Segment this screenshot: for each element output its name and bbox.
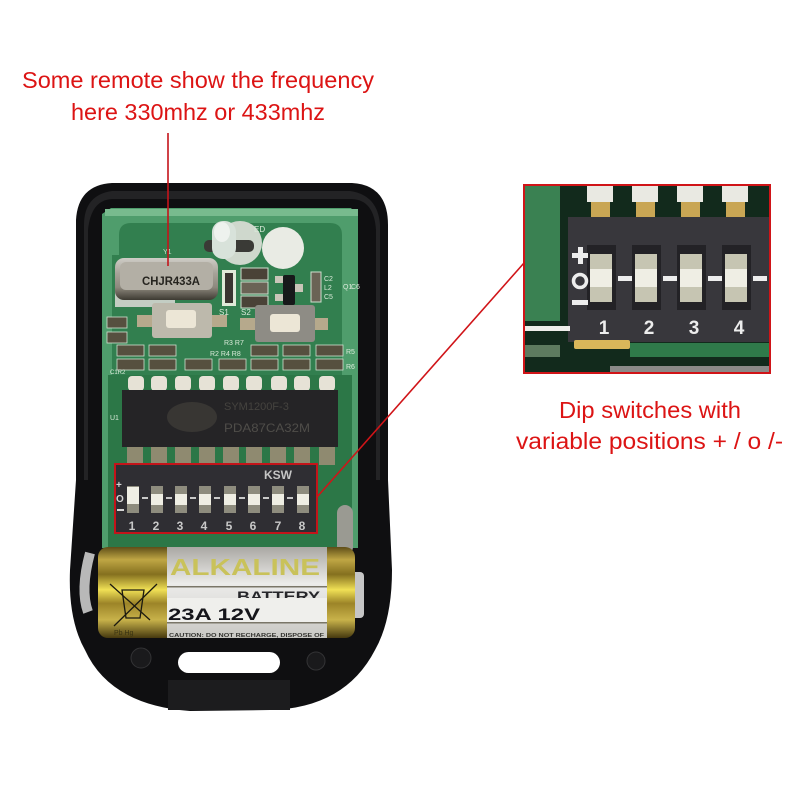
small SMD parts (222, 268, 360, 308)
switch numbers: 3 (177, 519, 184, 533)
red frame (524, 185, 770, 373)
sliders (590, 254, 747, 302)
switch body (568, 217, 770, 342)
slider wells (587, 245, 751, 310)
battery label: ALKALINE (170, 554, 320, 580)
callout line: crystal (167, 133, 169, 266)
small SMD parts: L2 (324, 285, 332, 292)
push button S1 (137, 303, 229, 338)
crystal with frequency marking: CHJR433A (142, 276, 200, 288)
circuit board: C1R2 (110, 370, 126, 376)
remote control housing (70, 183, 392, 711)
circuit board: Y1 (163, 249, 172, 256)
resistor rows (107, 317, 343, 370)
keyring slot (178, 652, 280, 673)
close-up numbers: 1 (599, 318, 610, 339)
circuit board: R6 (346, 364, 355, 371)
close-up numbers (599, 318, 745, 339)
recycling crossed-bin mark: Pb Hg (114, 630, 134, 637)
bottom tab (168, 680, 290, 710)
IC pins (128, 376, 335, 391)
battery (84, 547, 364, 639)
close-up numbers: 4 (734, 318, 745, 339)
callout text: frequency note: Some remote show the frequency (22, 67, 375, 93)
switch sliders (127, 486, 309, 513)
switch numbers: 1 (129, 519, 136, 533)
callout text: frequency note: here 330mhz or 433mhz (71, 99, 325, 125)
LED (204, 221, 262, 265)
push button S2: S2 (241, 308, 251, 317)
KSW label: KSW (264, 468, 293, 482)
IC chip: U1 (110, 415, 119, 422)
small SMD parts: C2 (324, 276, 333, 283)
callout line: DIP switches (317, 263, 524, 497)
circuit board (102, 208, 360, 555)
circuit board: R2 R4 R8 (210, 351, 241, 358)
screw right (307, 652, 325, 670)
position markings (116, 480, 124, 511)
panel: DIP switch close-up (524, 185, 770, 373)
IC chip: PDA87CA32M (224, 421, 310, 435)
switch numbers: 5 (226, 519, 233, 533)
close-up numbers: 2 (644, 318, 654, 339)
solder pads (587, 186, 748, 202)
close-up numbers: 3 (689, 318, 699, 339)
switch numbers: 8 (299, 519, 306, 533)
crystal with frequency marking (115, 258, 218, 307)
callout text: dip switches: variable positions + / o /- (516, 428, 783, 454)
screw left (131, 648, 151, 668)
battery label (167, 547, 327, 639)
position markings: O (116, 494, 124, 505)
switch numbers: 2 (153, 519, 160, 533)
position markers and dashes (572, 247, 767, 305)
battery label: 23A 12V (168, 605, 261, 624)
push button S2 (240, 305, 328, 342)
board through-hole (262, 227, 304, 269)
push button S1: S1 (219, 308, 229, 317)
circuit board: R5 (346, 349, 355, 356)
switch numbers: 4 (201, 519, 208, 533)
circuit board: R3 R7 (224, 340, 244, 347)
recycling crossed-bin mark (110, 584, 157, 637)
battery label: CAUTION: DO NOT RECHARGE, DISPOSE OF (169, 633, 325, 639)
position markings: + (116, 480, 122, 491)
small SMD parts: C6 (351, 284, 360, 291)
callout text: dip switches: Dip switches with (559, 397, 741, 423)
lower edge contact (574, 340, 630, 349)
circuit board: ED (254, 225, 265, 234)
battery label: BATTERY (237, 588, 321, 604)
IC chip: SYM1200F-3 (224, 401, 289, 413)
small SMD parts: C5 (324, 294, 333, 301)
DIP switch block with red highlight (115, 464, 317, 533)
metal contact (337, 505, 353, 555)
callout text: dip switches (516, 397, 783, 454)
switch numbers (129, 519, 306, 533)
switch numbers: 7 (275, 519, 282, 533)
IC chip (110, 390, 338, 447)
switch numbers: 6 (250, 519, 257, 533)
small SMD parts: Q1 (343, 284, 352, 291)
callout text: frequency note (22, 67, 375, 125)
